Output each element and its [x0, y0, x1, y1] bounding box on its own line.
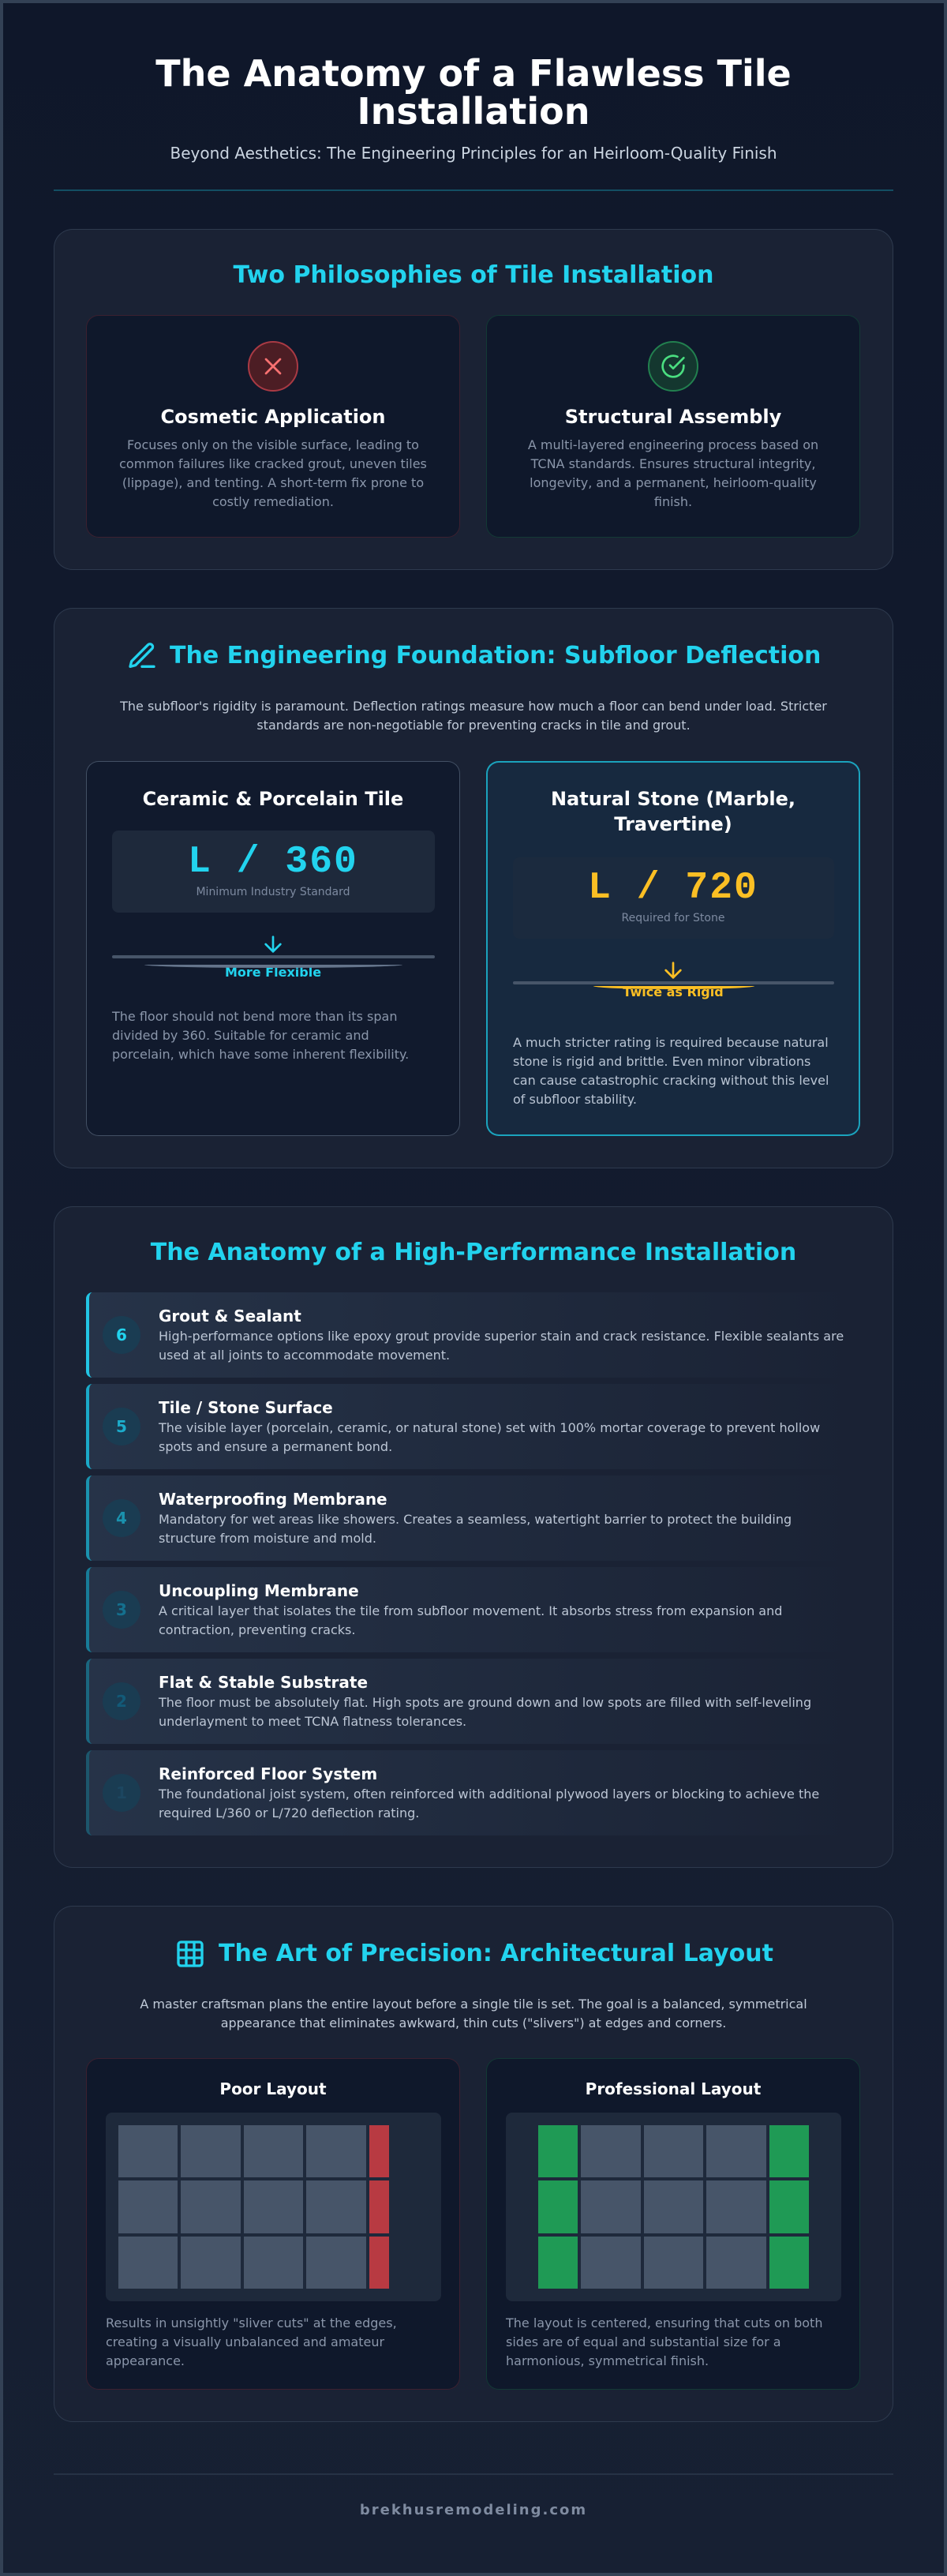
number 5: 5 — [116, 1417, 127, 1436]
intro text: appearance that eliminates awkward, thin cuts ("slivers") at edges and corners. — [221, 2015, 726, 2030]
layer title: Reinforced Floor System — [159, 1764, 377, 1783]
card title: Ceramic & Porcelain Tile — [143, 788, 403, 810]
card: structural assembly — [486, 315, 860, 538]
number 2 — [103, 1682, 140, 1720]
layer title: Flat & Stable Substrate — [159, 1673, 368, 1692]
card text: Results in unsightly "sliver cuts" at the edges, — [106, 2315, 397, 2330]
card text: can cause catastrophic cracking without this level — [513, 1073, 829, 1088]
card text — [112, 1009, 409, 1062]
card text: TCNA standards. Ensures structural integrity, — [531, 456, 815, 471]
layer title: Grout & Sealant — [159, 1307, 301, 1325]
tile diagram — [106, 2113, 441, 2301]
number 4 — [103, 1499, 140, 1537]
rigid label: Twice as Rigid — [623, 984, 724, 999]
layer 5 — [86, 1384, 861, 1469]
intro text: A master craftsman plans the entire layout before a single tile is set. The goal is a balanced, symmetrical — [140, 1997, 807, 2012]
card title: Professional Layout — [586, 2079, 761, 2098]
layer title: Tile / Stone Surface — [159, 1398, 333, 1417]
layer text: A critical layer that isolates the tile from subfloor movement. It absorbs stress from expansion and — [159, 1603, 782, 1618]
card text: The layout is centered, ensuring that cuts on both — [506, 2315, 822, 2330]
layer 2 — [86, 1659, 861, 1744]
beam — [112, 955, 435, 958]
heading: engineering foundation: The Engineering Foundation: Subfloor Deflection — [170, 642, 821, 669]
layer text: required L/360 or L/720 deflection rating. — [159, 1805, 419, 1820]
card text: divided by 360. Suitable for ceramic and — [112, 1028, 369, 1043]
rating box — [513, 857, 834, 939]
card: ceramic and porcelain — [86, 761, 460, 1136]
layer text: The floor must be absolutely flat. High spots are ground down and low spots are filled with self-leveling — [159, 1695, 811, 1710]
intro text — [120, 699, 827, 733]
layer text: used at all joints to accommodate movement. — [159, 1348, 450, 1363]
card text: of subfloor stability. — [513, 1092, 637, 1107]
number 3: 3 — [116, 1600, 127, 1619]
card text — [528, 437, 818, 509]
card title: Poor Layout — [219, 2079, 327, 2098]
card text: The floor should not bend more than its span — [112, 1009, 397, 1024]
panel: two philosophies — [54, 229, 893, 570]
number 1 — [103, 1774, 140, 1812]
card text: common failures like cracked grout, uneven tiles — [119, 456, 427, 471]
card: professional layout — [486, 2058, 860, 2390]
card text: A multi-layered engineering process based on — [528, 437, 818, 452]
layer text — [159, 1329, 844, 1363]
beam — [513, 981, 834, 984]
layer text: underlayment to meet TCNA flatness tolerances. — [159, 1714, 466, 1729]
card text — [513, 1035, 829, 1107]
layer 4 — [86, 1475, 861, 1561]
footer divider — [54, 2473, 893, 2475]
layer text: The visible layer (porcelain, ceramic, or natural stone) set with 100% mortar coverage to prevent hollow — [159, 1420, 820, 1435]
title: Installation — [357, 90, 590, 133]
card title: Travertine) — [614, 813, 732, 835]
card text: (lippage), and tenting. A short-term fix prone to — [122, 475, 424, 490]
layer text: The foundational joist system, often reinforced with additional plywood layers or blocking to achieve the — [159, 1787, 819, 1802]
card: natural stone — [486, 761, 860, 1136]
heading: high-performance anatomy: The Anatomy of a High-Performance Installation — [151, 1239, 796, 1266]
layer text: structure from moisture and mold. — [159, 1531, 376, 1546]
card text: appearance. — [106, 2353, 185, 2368]
card text: harmonious, symmetrical finish. — [506, 2353, 709, 2368]
subtitle: Beyond Aesthetics: The Engineering Principles for an Heirloom-Quality Finish — [170, 144, 777, 163]
heading: art of precision: The Art of Precision: Architectural Layout — [219, 1940, 773, 1967]
layer 6 — [86, 1292, 861, 1378]
card title — [551, 788, 795, 835]
number 6 — [103, 1316, 140, 1354]
card text: longevity, and a permanent, heirloom-quality — [530, 475, 817, 490]
deflection curve — [144, 965, 402, 968]
layer text: spots and ensure a permanent bond. — [159, 1439, 392, 1454]
layer 1 — [86, 1750, 861, 1835]
intro text: standards are non-negotiable for preventing cracks in tile and grout. — [256, 718, 691, 733]
card text — [505, 2315, 822, 2368]
layer text — [158, 1695, 811, 1729]
card title: Natural Stone (Marble, — [551, 788, 795, 810]
header divider — [54, 189, 893, 191]
panel: installation layers — [54, 1206, 893, 1868]
card text — [119, 437, 427, 509]
number 6: 6 — [116, 1325, 127, 1344]
rating caption: Required for Stone — [622, 912, 724, 924]
layer text — [158, 1787, 819, 1820]
intro text: The subfloor's rigidity is paramount. Deflection ratings measure how much a floor can bend under load. Stricter — [120, 699, 827, 714]
card text: costly remediation. — [212, 494, 334, 509]
panel: subfloor deflection — [54, 608, 893, 1168]
card text: A much stricter rating is required because natural — [513, 1035, 829, 1050]
card text — [106, 2315, 397, 2368]
rating box — [112, 831, 435, 913]
card text: stone is rigid and brittle. Even minor vibrations — [513, 1054, 810, 1069]
rating value: L / 360 — [188, 841, 358, 883]
layer text — [159, 1603, 782, 1637]
title: The Anatomy of a Flawless Tile — [155, 52, 792, 95]
icon: down arrow — [264, 936, 282, 953]
card title: Structural Assembly — [565, 406, 781, 428]
layer text — [159, 1512, 792, 1546]
card text: sides are of equal and substantial size for a — [506, 2334, 781, 2349]
icon: grid — [177, 1940, 204, 1967]
layer text: Mandatory for wet areas like showers. Creates a seamless, watertight barrier to protect the building — [159, 1512, 792, 1527]
card text: porcelain, which have some inherent flexibility. — [112, 1047, 409, 1062]
icon: pen — [129, 643, 155, 668]
icon: x mark — [248, 341, 298, 392]
layer text — [158, 1420, 820, 1454]
layer title: Waterproofing Membrane — [159, 1490, 387, 1509]
card: poor layout — [86, 2058, 460, 2390]
number 2: 2 — [116, 1692, 127, 1711]
card title: Cosmetic Application — [160, 406, 386, 428]
card text: creating a visually unbalanced and amateur — [106, 2334, 384, 2349]
tile diagram — [506, 2113, 841, 2301]
number 4: 4 — [116, 1509, 127, 1528]
number 5 — [103, 1408, 140, 1445]
icon: check circle — [648, 341, 698, 392]
rating value: L / 720 — [588, 867, 758, 909]
flex label: More Flexible — [225, 965, 321, 980]
rating caption: Minimum Industry Standard — [196, 886, 350, 898]
title — [155, 52, 792, 133]
intro text — [140, 1997, 807, 2030]
panel: architectural layout — [54, 1906, 893, 2422]
layer text: contraction, preventing cracks. — [159, 1622, 355, 1637]
number 3 — [103, 1591, 140, 1629]
footer url: brekhusremodeling.com — [360, 2502, 587, 2518]
layer text: High-performance options like epoxy grout provide superior stain and crack resistance. Flexible sealants are — [159, 1329, 844, 1344]
deflection curve — [593, 986, 754, 989]
layer 3 — [86, 1567, 861, 1652]
number 1: 1 — [116, 1783, 127, 1802]
layer title: Uncoupling Membrane — [159, 1581, 359, 1600]
card: cosmetic application — [86, 315, 460, 538]
icon: down arrow — [664, 962, 682, 979]
card text: Focuses only on the visible surface, leading to — [127, 437, 419, 452]
card text: finish. — [654, 494, 692, 509]
heading: two philosophies: Two Philosophies of Tile Installation — [234, 261, 713, 289]
